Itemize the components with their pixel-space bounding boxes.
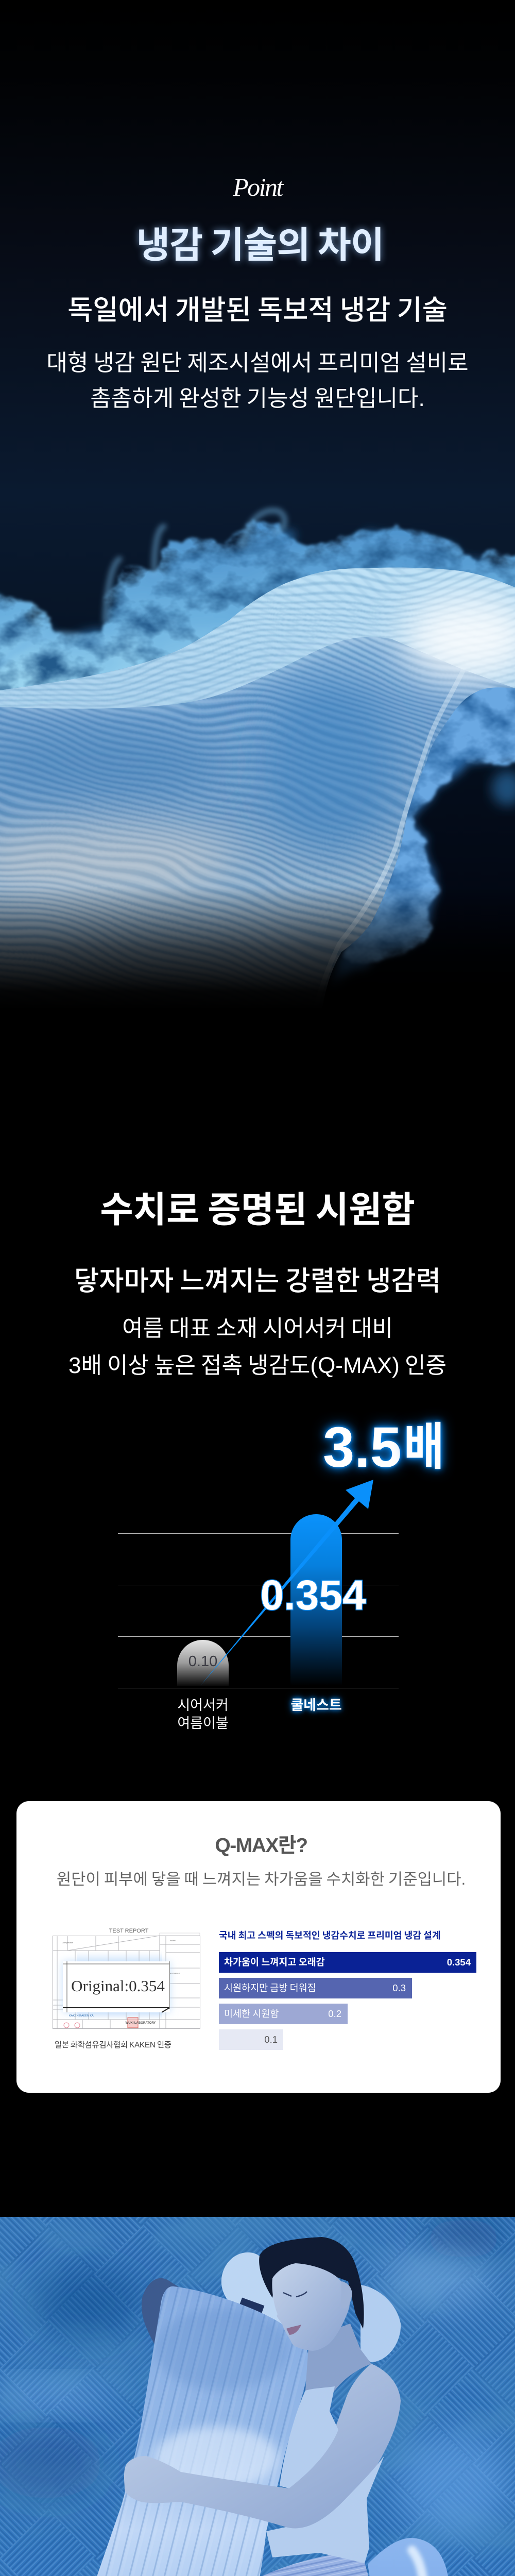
grid lines: [118, 1533, 399, 1688]
axis label: 시어서커 여름이불: [177, 1698, 229, 1731]
report labels: [62, 1928, 180, 2025]
head pillow: [221, 2252, 401, 2362]
heading: 수치로 증명된 시원함: 수치로 증명된 시원함: [100, 1190, 415, 1230]
ribbed texture: [0, 568, 515, 963]
axis label: 시어서커 여름이불: 시어서커: [177, 1698, 229, 1713]
camisole: [266, 2386, 384, 2563]
value: 0.10: 0.10: [188, 1653, 217, 1670]
axis label: 시어서커 여름이불: 여름이불: [177, 1716, 229, 1731]
bar: 0.2: 0.2: [328, 2008, 341, 2019]
panel: sleeping woman hugging body pillow: [0, 2217, 515, 2576]
body text: 촘촘하게 완성한 기능성 원단입니다.: [90, 386, 425, 411]
panel: Q-MAX explanation card: [16, 1801, 501, 2093]
magnified value box: Original:0.354: [71, 1977, 165, 1995]
satin bedding: [82, 2538, 477, 2576]
near arm and shoulder: [124, 2364, 401, 2530]
description: 원단이 피부에 닿을 때 느껴지는 차가움을 수치화한 기준입니다.: [57, 1870, 466, 1888]
report labels: NAME: [170, 1939, 176, 1942]
heading: Q-MAX란?: Q-MAX란?: [215, 1835, 307, 1857]
test report document: [53, 1928, 200, 2029]
bar: 0.3: [219, 1978, 412, 1998]
body text: [46, 350, 469, 411]
chart heading: 국내 최고 스펙의 독보적인 냉감수치로 프리미엄 냉감 설계: [219, 1930, 441, 1941]
callout: 3.5배: 3.5: [323, 1416, 402, 1479]
panel: Q-MAX performance chart section: [68, 1190, 451, 1731]
magnified value box: [63, 1961, 170, 2012]
report labels: Composition: [62, 1941, 73, 1944]
body text: 대형 냉감 원단 제조시설에서 프리미엄 설비로: [46, 350, 469, 376]
value: 0.354: 0.354: [260, 1572, 366, 1619]
background gradient: [0, 0, 515, 1030]
panel: fabric and cold vapour hero: [0, 112, 515, 990]
label: Point: Point: [233, 173, 282, 201]
body text: 여름 대표 소재 시어서커 대비: [122, 1316, 393, 1341]
caption: KAKEN certification: 일본 화확섬유검사협회 KAKEN 인증: [55, 2041, 171, 2049]
subheading: 닿자마자 느껴지는 강렬한 냉감력: [74, 1266, 441, 1296]
bar: 0.354: 차가움이 느껴지고 오래감: [224, 1957, 325, 1968]
bar: 0.1: 0.1: [264, 2034, 278, 2045]
quilted bedding: [0, 2217, 515, 2576]
report labels: ADDRESS: [170, 1972, 180, 1975]
callout: 3.5배: 배: [404, 1418, 444, 1475]
bottom fade to black: [0, 886, 515, 1010]
illustration: bedroom scene in blue light: [0, 2217, 515, 2576]
body pillow: [97, 2286, 308, 2576]
report labels: WUXI LABORATORY: [126, 2022, 156, 2025]
bar: 0.3: 0.3: [392, 1982, 406, 1993]
face: [272, 2263, 352, 2351]
vapour wisps: [0, 511, 285, 665]
report labels: TEST REPORT: [109, 1928, 149, 1934]
callout: 3.5배: [316, 1413, 451, 1479]
upper fold band: [0, 568, 515, 709]
neck: [305, 2324, 371, 2391]
hair: [259, 2237, 364, 2329]
bar: 시어서커: [177, 1640, 229, 1686]
bar: 0.1: [219, 2029, 283, 2050]
arrow rising to 3.5배: [200, 1480, 373, 1686]
body text: [68, 1316, 447, 1378]
trousers upper: [263, 2555, 368, 2576]
subheading: 독일에서 개발된 독보적 냉감 기술: [67, 295, 448, 326]
heading: 냉감 기술의 차이: 냉감 기술의 차이: [136, 225, 384, 266]
report grid: [53, 1936, 200, 2029]
bar: 0.2: [219, 2004, 348, 2024]
bar: 0.2: 미세한 시원함: [224, 2008, 279, 2019]
body text: 3배 이상 높은 접촉 냉감도(Q-MAX) 인증: [68, 1353, 447, 1378]
vapour: right lower plume: [330, 680, 515, 994]
fabric: [0, 568, 515, 990]
axis label: 쿨네스트: 쿨네스트: [290, 1698, 342, 1713]
far arm and hand: [142, 2278, 187, 2349]
bar chart: [118, 1480, 399, 1688]
vapour: upper plume: [0, 511, 515, 706]
bar: 0.354: [219, 1952, 476, 1973]
fabric light and shade: [0, 595, 515, 1010]
illustration: quilted fabric with blue vapour: [0, 112, 515, 990]
bar: 0.3: 시원하지만 금방 더워짐: [224, 1982, 316, 1993]
report labels: KAKEN KAKEN KA: [69, 2014, 94, 2018]
bar: 쿨네스트: [290, 1514, 342, 1686]
bar: 0.354: 0.354: [447, 1957, 471, 1968]
